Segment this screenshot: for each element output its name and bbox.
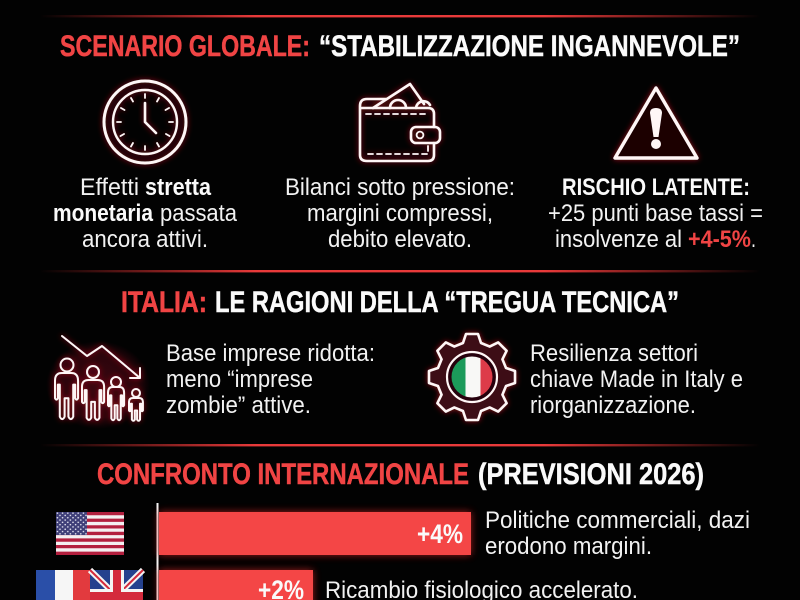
text: rischio: RISCHIO LATENTE: bbox=[562, 174, 750, 201]
text: politiche commerciali: erodono margini. bbox=[485, 533, 652, 560]
text: base imprese ridotta: zombie” attive. bbox=[166, 392, 311, 419]
text: base imprese ridotta: meno “imprese bbox=[166, 366, 313, 393]
icon: france flag bbox=[36, 570, 91, 600]
panel: stretta monetaria bbox=[53, 81, 237, 253]
panel: base imprese bbox=[46, 336, 375, 429]
text: bilanci: debito elevato. bbox=[328, 226, 472, 253]
text: resilienza: Resilienza settori bbox=[530, 340, 698, 367]
panel: made in italy bbox=[429, 334, 743, 420]
heading: italia bbox=[121, 286, 679, 319]
chart: forecast bars bbox=[36, 503, 750, 600]
text: rischio: +4-5% bbox=[688, 226, 751, 253]
icon: gear with italian flag bbox=[429, 334, 515, 420]
text: base imprese ridotta bbox=[166, 340, 375, 419]
icon: uk flag bbox=[90, 570, 143, 600]
bar: france uk +2% bbox=[159, 570, 313, 600]
bar: usa +4%: +4% bbox=[417, 519, 463, 549]
text: effetti stretta monetaria: ancora attivi. bbox=[82, 226, 208, 253]
text: politiche commerciali: Politiche commerciali, dazi bbox=[485, 507, 750, 534]
panel: rischio latente bbox=[548, 88, 763, 253]
icon: haze behind people bbox=[46, 341, 150, 429]
text: rischio: +25 punti base tassi = bbox=[548, 200, 763, 227]
row: france and uk bbox=[36, 570, 638, 600]
heading: confronto internazionale: CONFRONTO INTERNAZIONALE bbox=[97, 458, 469, 491]
text: rischio bbox=[548, 174, 763, 253]
text: rischio: . bbox=[751, 226, 756, 253]
text: rischio: insolvenze al bbox=[555, 226, 682, 253]
text: bilanci: Bilanci sotto pressione: bbox=[285, 174, 515, 201]
text: resilienza bbox=[530, 340, 743, 419]
text: resilienza: riorganizzazione. bbox=[530, 392, 696, 419]
text: bilanci bbox=[285, 174, 515, 253]
text: effetti stretta monetaria: monetaria bbox=[53, 200, 153, 227]
text: resilienza: chiave Made in Italy e bbox=[530, 366, 743, 393]
heading: italia: ITALIA: bbox=[121, 286, 207, 319]
heading: scenario globale: SCENARIO GLOBALE: bbox=[60, 30, 310, 63]
panel: bilanci sotto pressione bbox=[285, 84, 515, 253]
text: effetti stretta monetaria bbox=[53, 174, 237, 253]
bar: usa +4% bbox=[159, 512, 471, 555]
heading: scenario globale bbox=[60, 30, 740, 63]
row: usa bbox=[56, 507, 750, 560]
text: politiche commerciali bbox=[485, 507, 750, 560]
text: effetti stretta monetaria: stretta bbox=[145, 174, 211, 201]
divider: lower bbox=[40, 444, 760, 446]
heading: italia: LE RAGIONI DELLA “TREGUA TECNICA” bbox=[215, 286, 679, 319]
bar axis bbox=[156, 503, 158, 600]
icon: wallet bbox=[360, 84, 440, 161]
icon: usa flag bbox=[56, 512, 124, 555]
text: bilanci: margini compressi, bbox=[307, 200, 493, 227]
text: effetti stretta monetaria: Effetti bbox=[80, 174, 139, 201]
icon: shrinking people and falling arrow bbox=[55, 336, 143, 421]
icon: clock bbox=[104, 81, 186, 163]
divider: middle bbox=[40, 270, 760, 272]
icon: warning triangle bbox=[615, 88, 697, 158]
text: base imprese ridotta: Base imprese ridotta: bbox=[166, 340, 375, 367]
divider: top bbox=[40, 15, 760, 17]
text: effetti stretta monetaria: passata bbox=[160, 200, 237, 227]
heading: confronto internazionale: (PREVISIONI 2026) bbox=[478, 458, 704, 491]
